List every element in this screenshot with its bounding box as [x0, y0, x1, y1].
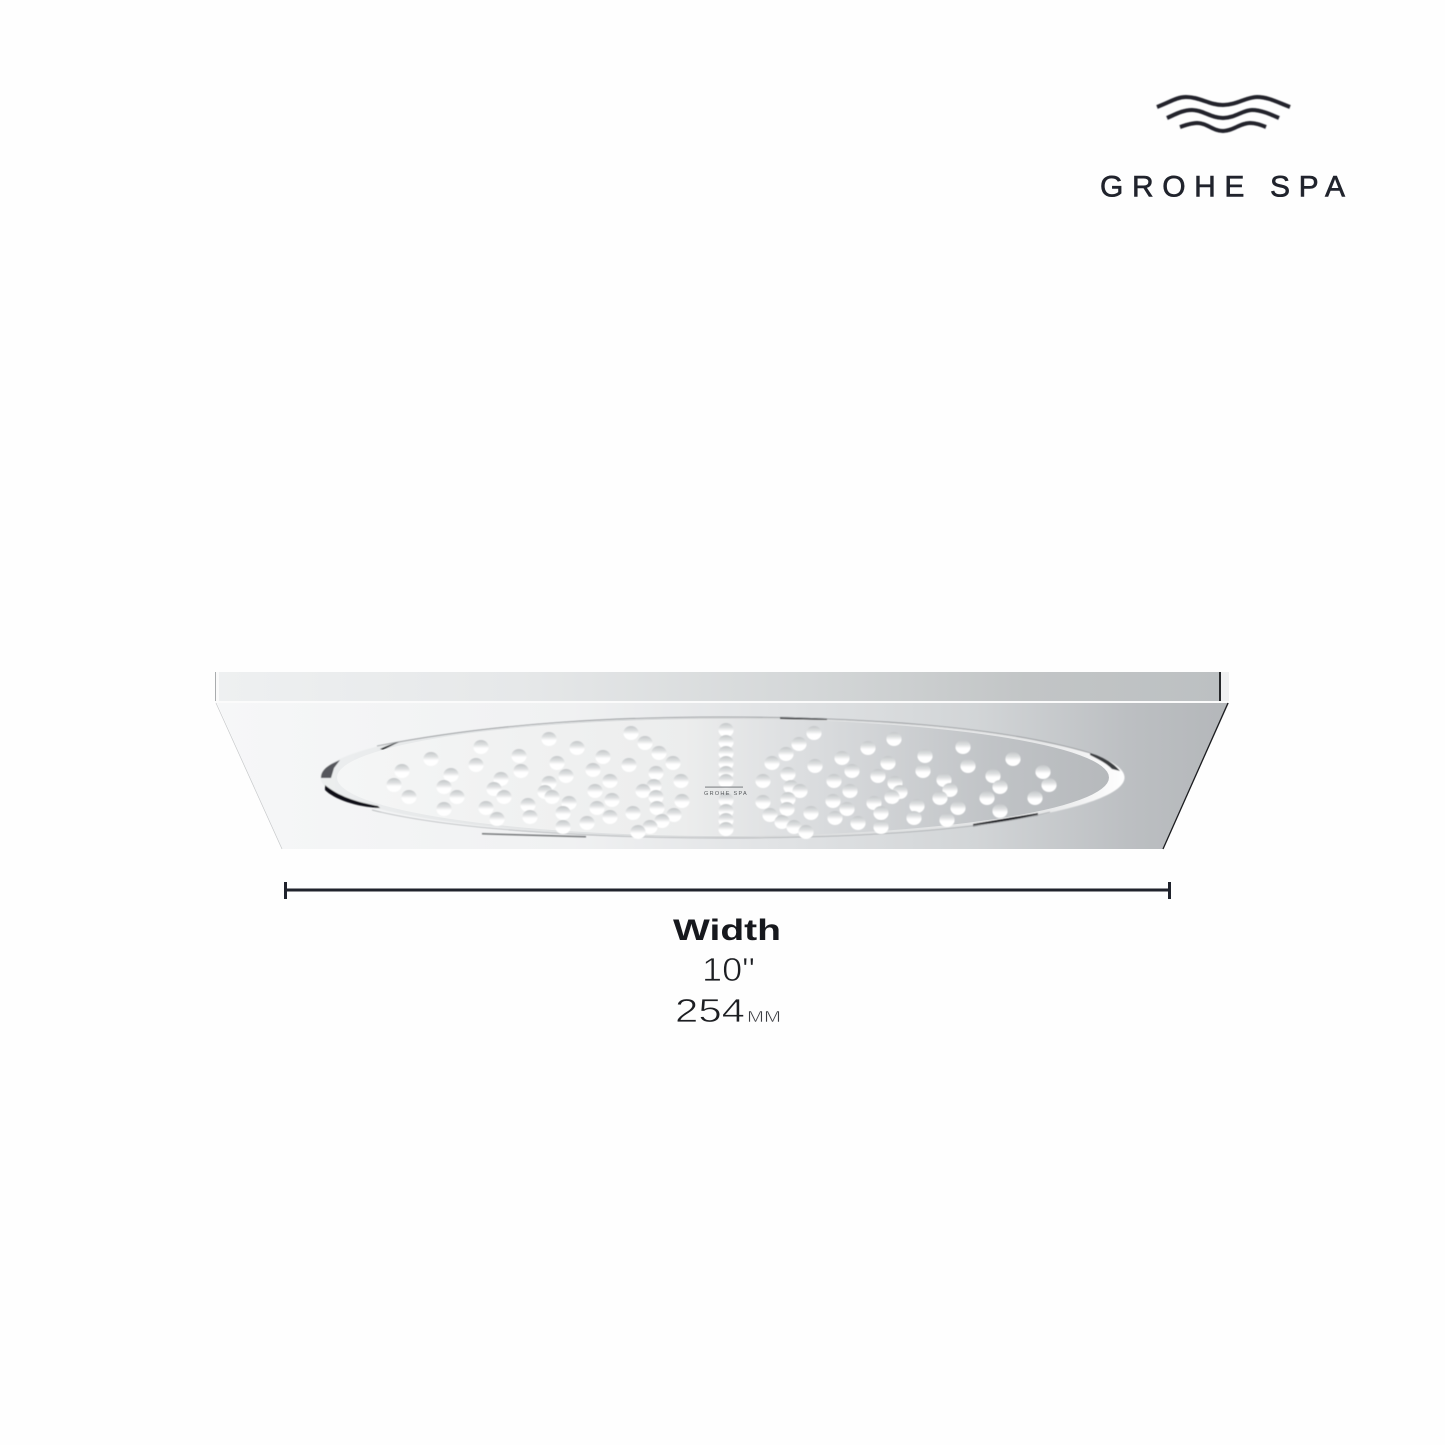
plate right edge: [1163, 703, 1228, 849]
width label: [673, 914, 781, 1029]
center brand mark: [704, 786, 748, 797]
center brand mark: GROHE SPA: [704, 791, 748, 797]
plate: [217, 703, 1229, 849]
top band: [215, 672, 1229, 703]
wordmark: GROHE SPA: [1100, 170, 1345, 204]
heading: Width: Width: [673, 914, 781, 947]
spray nozzles: [386, 723, 1057, 839]
plate left edge: [216, 703, 282, 849]
icon: waves: [1157, 97, 1290, 131]
value: millimetres: MM: [747, 1009, 781, 1026]
value: millimetres: [675, 992, 781, 1029]
rim of round spray face: [320, 717, 1124, 838]
value: millimetres: 254: [675, 992, 745, 1029]
spray face: [337, 719, 1109, 836]
width dimension line: [284, 882, 1171, 899]
value: inches: 10": [702, 951, 755, 988]
shower head: [215, 672, 1229, 849]
logo: GROHE SPA: [1100, 97, 1345, 204]
